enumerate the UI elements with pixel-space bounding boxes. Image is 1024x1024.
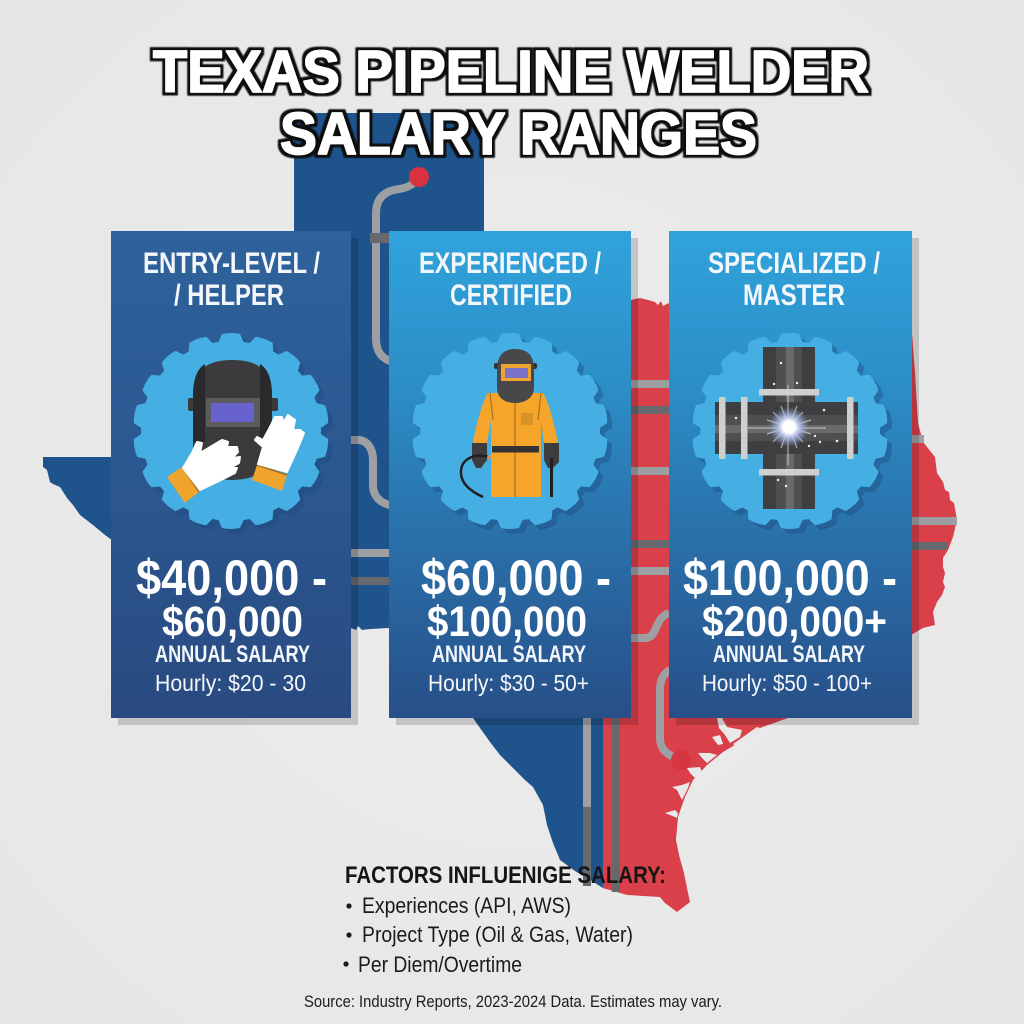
factors list: Experiences (API, AWS) [362, 893, 571, 918]
heading: specialized: SPECIALIZED / [708, 247, 881, 280]
salary: experienced: ANNUAL SALARY [432, 641, 586, 668]
salary: specialized: $200,000+ [702, 598, 887, 646]
coastal bays [665, 718, 760, 873]
title: SALARY RANGES [280, 101, 757, 167]
map: red eastern half [603, 298, 957, 912]
pipeline: light segments [351, 177, 957, 807]
salary: specialized: ANNUAL SALARY [713, 641, 865, 668]
heading: experienced: EXPERIENCED / [419, 247, 602, 280]
pipeline: dark segments [351, 238, 948, 892]
panel: experienced / certified [389, 231, 631, 718]
salary: specialized [683, 550, 897, 696]
title [153, 39, 869, 167]
salary: experienced [421, 550, 611, 696]
panel: specialized / master [669, 231, 912, 718]
Texas map with pipelines [43, 113, 957, 912]
factors list: Per Diem/Overtime [358, 952, 522, 977]
heading: experienced [419, 247, 602, 312]
heading: entry-level: ENTRY-LEVEL / [143, 247, 321, 280]
heading: specialized [708, 247, 881, 312]
salary: entry-level: $60,000 [162, 598, 303, 646]
red valve top [409, 167, 429, 187]
factors list: FACTORS INFLUENIGE SALARY: [345, 862, 666, 889]
salary: entry-level: ANNUAL SALARY [155, 641, 310, 668]
icon: gear with welder in orange suit [411, 333, 614, 534]
red valve coast [671, 750, 691, 770]
salary: entry-level: $40,000 - [136, 550, 327, 606]
salary: entry-level [136, 550, 327, 696]
source note: Source: Industry Reports, 2023-2024 Data. Estimates may vary. [304, 993, 722, 1011]
factors list: Project Type (Oil & Gas, Water) [362, 922, 633, 947]
salary: entry-level: Hourly: $20 - 30 [155, 670, 306, 696]
heading: experienced: CERTIFIED [450, 279, 572, 312]
heading: entry-level: / HELPER [174, 279, 284, 312]
salary: experienced: $60,000 - [421, 550, 611, 606]
factors list [343, 862, 666, 977]
panel: entry-level / helper [111, 231, 351, 718]
salary: experienced: Hourly: $30 - 50+ [428, 670, 589, 696]
map: blue western half [43, 113, 606, 889]
title: TEXAS PIPELINE WELDER [153, 39, 869, 105]
salary: experienced: $100,000 [427, 598, 587, 646]
card shadows [118, 238, 919, 725]
heading: entry-level [143, 247, 321, 312]
icon: gear with welded pipe cross [691, 333, 894, 534]
heading: specialized: MASTER [743, 279, 845, 312]
icon: gear with welding helmet and gloves [132, 333, 335, 534]
salary: specialized: Hourly: $50 - 100+ [702, 670, 872, 696]
salary: specialized: $100,000 - [683, 550, 897, 606]
